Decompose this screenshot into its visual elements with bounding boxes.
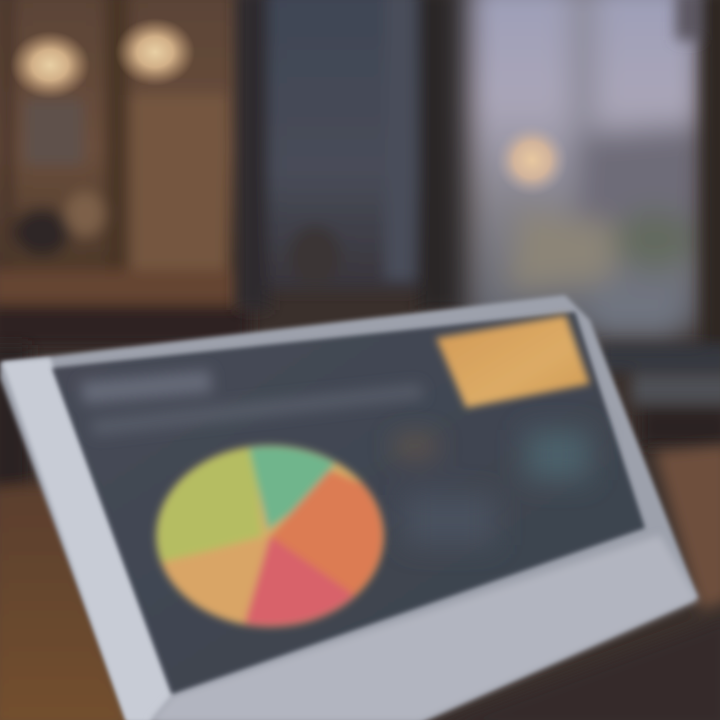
warm wall on the left bbox=[0, 0, 250, 346]
wooden table surfaces bbox=[0, 345, 720, 720]
frame bottom edge bbox=[150, 535, 698, 720]
slice: teal bbox=[246, 441, 338, 532]
small stats blocks bbox=[395, 430, 590, 545]
wall lamp left bbox=[10, 31, 90, 99]
orange highlight card bbox=[436, 315, 590, 408]
slice: yellow-orange bbox=[168, 544, 262, 624]
tablet bbox=[0, 295, 698, 720]
setting sun in window bbox=[496, 124, 568, 196]
frame left edge bbox=[2, 358, 172, 720]
slice: yellow-green bbox=[154, 446, 264, 563]
bright window view on the right bbox=[468, 0, 703, 340]
right wall edge and sill bbox=[600, 0, 720, 446]
header text bars bbox=[80, 370, 424, 436]
pie chart bbox=[150, 440, 390, 633]
central dark window frame and blinds bbox=[236, 0, 468, 310]
dashboard screen bbox=[52, 312, 645, 694]
slice: orange bbox=[270, 468, 386, 598]
tablet frame bbox=[0, 295, 698, 720]
slice: pink-red bbox=[242, 534, 354, 630]
wall lamp right bbox=[115, 18, 195, 86]
